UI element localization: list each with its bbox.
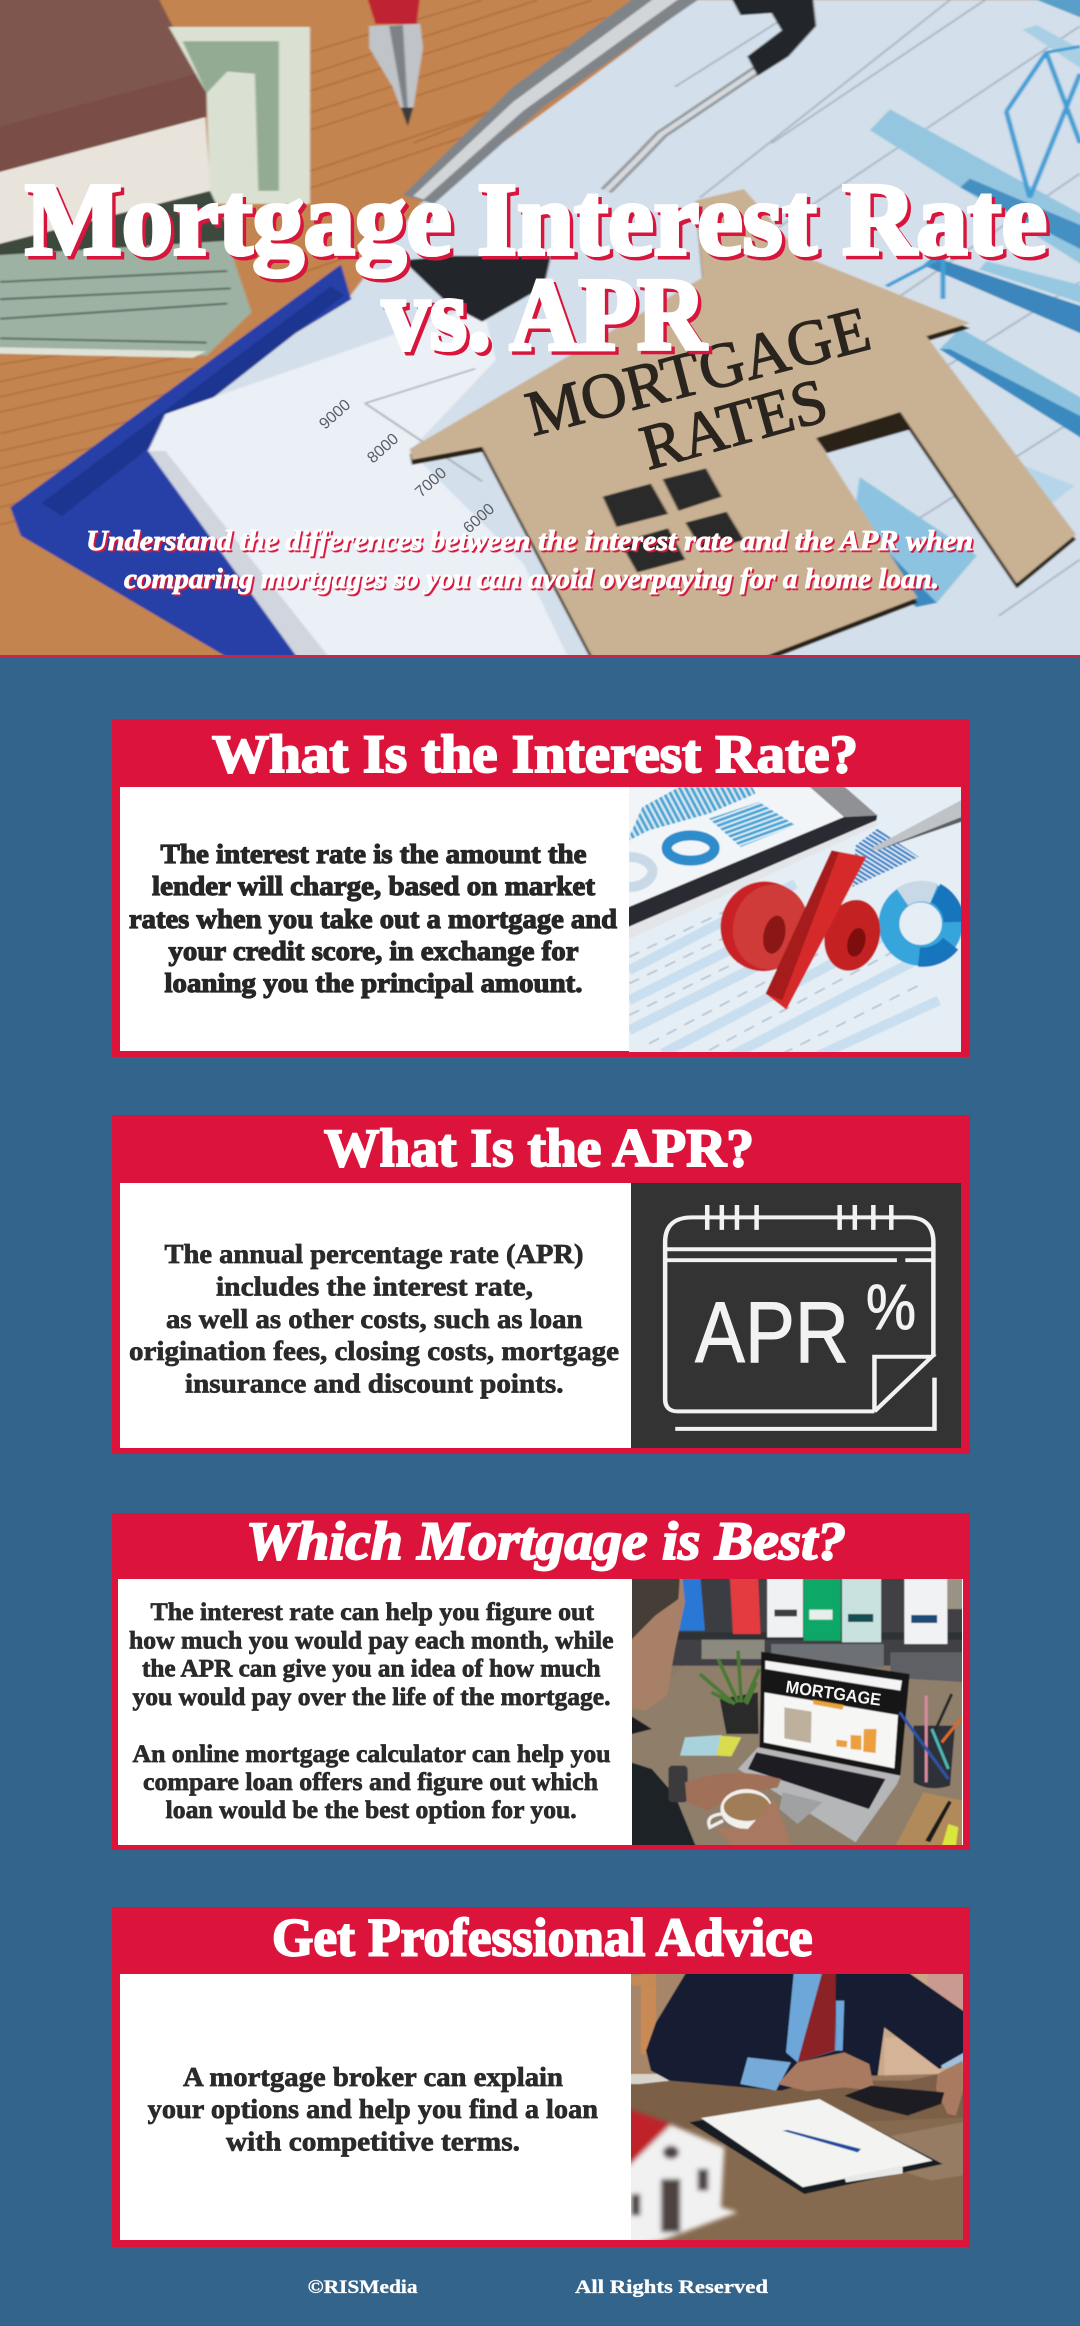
heading: APR: What Is the APR?	[324, 1118, 754, 1178]
hero chart numbers: 6000	[460, 500, 498, 537]
text: interest rate definition: rates when you take out a mortgage and	[129, 904, 617, 934]
text: comparing rate and APR: compare loan offers and figure out which	[143, 1769, 598, 1796]
text: comparing rate and APR: the APR can give you an idea of how much	[142, 1656, 601, 1682]
panel: which mortgage is best	[112, 1511, 970, 1852]
photo: man at laptop showing mortgage page	[625, 1572, 970, 1852]
text: comparing rate and APR: loan would be the best option for you.	[166, 1797, 577, 1824]
footer: copyright: ©RISMedia	[308, 2277, 418, 2298]
text: interest rate definition: lender will charge, based on market	[152, 871, 595, 901]
hero chart numbers: 7000	[412, 464, 450, 501]
text: mortgage broker advice: your options and help you find a loan	[148, 2094, 598, 2124]
heading: professional advice: Get Professional Advice	[272, 1908, 812, 1968]
text: mortgage broker advice: A mortgage broker can explain	[183, 2062, 563, 2092]
icon: APR calendar: %	[866, 1271, 916, 1343]
text: comparing rate and APR: The interest rate can help you figure out	[150, 1599, 595, 1626]
panel: what is the interest rate	[112, 719, 970, 1060]
subtitle: comparing mortgages so you can avoid overpaying for a home loan.	[124, 563, 939, 595]
text: interest rate definition: loaning you the principal amount.	[164, 968, 582, 998]
text: mortgage broker advice: with competitive terms.	[226, 2126, 520, 2156]
hero house lettering: RATES	[633, 364, 835, 483]
title	[25, 162, 1047, 372]
photo: broker with calculator and contract	[624, 1967, 971, 2247]
heading: which mortgage: Which Mortgage is Best?	[246, 1511, 846, 1571]
panel: get professional advice	[112, 1907, 971, 2247]
text: comparing rate and APR	[129, 1599, 614, 1824]
text: mortgage broker advice	[148, 2062, 598, 2156]
subtitle	[86, 525, 973, 595]
text: interest rate definition: The interest rate is the amount the	[160, 839, 587, 869]
text: interest rate definition: your credit score, in exchange for	[168, 936, 579, 966]
hero bottom rule	[0, 655, 1080, 658]
hero chart numbers: 8000	[364, 430, 402, 467]
text: comparing rate and APR: you would pay over the life of the mortgage.	[132, 1684, 610, 1711]
text: comparing rate and APR: how much you would pay each month, while	[129, 1628, 614, 1654]
subtitle: Understand the differences between the interest rate and the APR when	[86, 525, 973, 557]
icon: APR calendar: APR	[695, 1285, 849, 1381]
footer: rights reserved: All Rights Reserved	[575, 2277, 769, 2298]
hero photo: mortgage rates wooden house on clipboard	[0, 0, 1080, 694]
photo: man at laptop showing mortgage page: MORTGAGE	[785, 1676, 882, 1710]
panel: what is the APR	[112, 1115, 970, 1454]
hero chart numbers: 9000	[316, 396, 354, 433]
text: APR definition: insurance and discount points.	[185, 1368, 564, 1398]
text: APR definition: as well as other costs, such as loan	[166, 1304, 582, 1334]
text: comparing rate and APR: An online mortgage calculator can help you	[132, 1741, 611, 1768]
title: Mortgage Interest Rate	[25, 162, 1047, 277]
text: APR definition: origination fees, closing costs, mortgage	[129, 1336, 619, 1366]
photo: red percent sign on financial charts	[622, 780, 969, 1060]
title: vs. APR	[382, 257, 708, 372]
icon: APR calendar	[631, 1183, 961, 1448]
heading: interest rate: What Is the Interest Rate?	[212, 724, 858, 784]
hero house lettering: MORTGAGE	[519, 293, 877, 450]
text: APR definition	[129, 1239, 619, 1398]
hero chart numbers	[316, 396, 498, 537]
text: APR definition: includes the interest rate,	[216, 1272, 533, 1302]
text: APR definition: The annual percentage rate (APR)	[164, 1239, 584, 1269]
text: interest rate definition	[129, 839, 617, 998]
